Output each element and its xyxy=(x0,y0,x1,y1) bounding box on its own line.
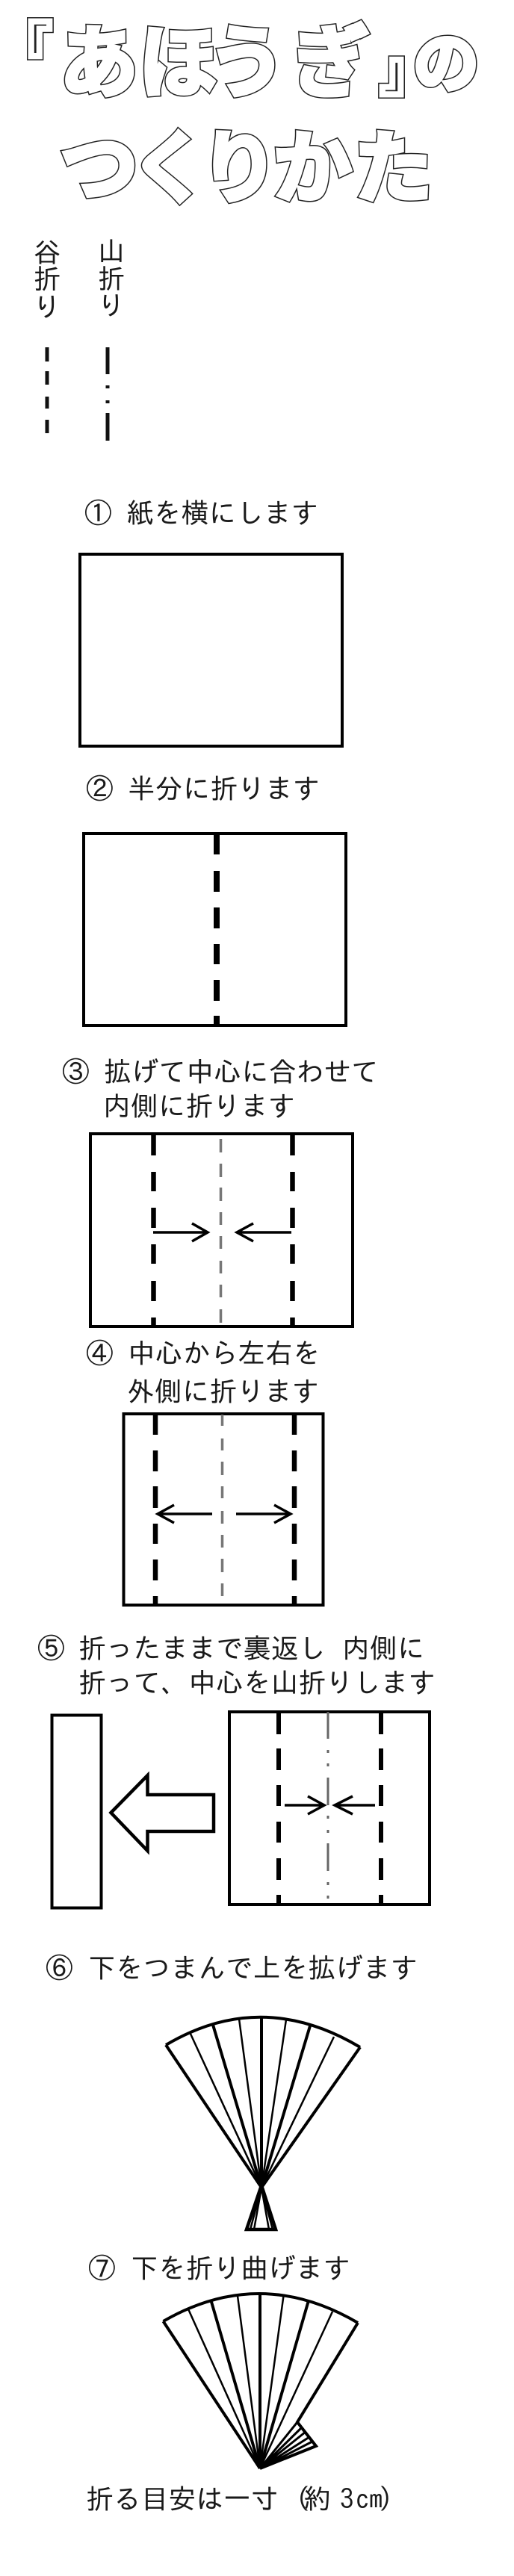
title: う xyxy=(208,0,286,114)
title: う xyxy=(208,0,286,114)
step 2 diagram: paper with centre fold xyxy=(84,834,346,1025)
step 2 heading: ② xyxy=(86,775,114,802)
step 3 diagram: fold to centre xyxy=(90,1134,353,1326)
title: あ xyxy=(60,0,138,114)
step 6 heading: ⑥ xyxy=(46,1954,73,1981)
arrows xyxy=(285,1796,375,1814)
step 1 heading: ① xyxy=(84,499,112,527)
step 5 diagram: fold and mountain fold centre xyxy=(229,1712,430,1905)
step 7 heading: ⑦ xyxy=(88,2254,116,2282)
step 5 block arrow xyxy=(111,1775,214,1851)
title: あ xyxy=(60,0,138,114)
note: 折る目安は一寸 xyxy=(86,2486,279,2513)
title: り xyxy=(200,105,279,219)
title: の xyxy=(413,11,479,106)
step 7 heading: 下を折り曲げます xyxy=(131,2254,350,2282)
step 5 heading: ⑤ xyxy=(37,1634,65,1662)
title: の xyxy=(413,11,479,106)
step 4 diagram: fold outward xyxy=(124,1414,323,1605)
step 5 heading: 折ったままで裏返し xyxy=(78,1635,326,1662)
title: ほ xyxy=(139,0,217,114)
title: か xyxy=(273,105,352,219)
title: ぎ xyxy=(291,0,370,114)
step 5 heading xyxy=(37,1634,436,1696)
legend: mountain fold: 山折り xyxy=(98,238,125,318)
step 4 heading: 外側に折ります xyxy=(127,1378,320,1405)
title: く xyxy=(130,105,208,219)
title: か xyxy=(273,105,352,219)
step 3 heading: ③ xyxy=(62,1058,90,1085)
note: m xyxy=(369,2486,383,2513)
title: つ xyxy=(60,105,138,219)
step 6 heading: 下をつまんで上を拡げます xyxy=(88,1954,418,1981)
legend: mountain fold xyxy=(98,238,125,441)
note: 約 xyxy=(303,2486,331,2513)
folded base lines xyxy=(260,2422,312,2468)
step 4 heading xyxy=(86,1339,321,1405)
pinched base xyxy=(247,2185,276,2229)
step 1 heading: 紙を横にします xyxy=(126,500,319,527)
note: （ xyxy=(282,2486,310,2513)
arrows xyxy=(153,1223,291,1241)
title: く xyxy=(130,105,208,219)
title xyxy=(0,0,479,219)
title: 』 xyxy=(380,25,436,107)
step 3 heading: 拡げて中心に合わせて xyxy=(104,1058,379,1085)
title: 』 xyxy=(380,25,436,107)
note: 3 xyxy=(340,2486,353,2513)
step 5 result: narrow folded strip xyxy=(52,1715,102,1908)
arrows xyxy=(158,1505,291,1523)
step 3 heading xyxy=(62,1058,379,1120)
legend: valley fold xyxy=(34,238,61,433)
legend: valley fold: 谷折り xyxy=(34,238,61,320)
step 1 diagram: paper xyxy=(80,554,342,746)
title: り xyxy=(200,105,279,219)
title: ほ xyxy=(139,0,217,114)
note: c xyxy=(356,2486,369,2513)
step 4 heading: 中心から左右を xyxy=(128,1340,321,1367)
step 4 heading: ④ xyxy=(86,1339,114,1367)
title: つ xyxy=(60,105,138,219)
step 5 heading: 折って、中心を山折りします xyxy=(78,1669,436,1696)
title: た xyxy=(354,105,433,219)
step 5 heading: 内側に xyxy=(342,1635,424,1662)
note: ） xyxy=(379,2486,406,2513)
title: た xyxy=(354,105,433,219)
step 7 diagram: fan with folded base xyxy=(163,2294,358,2468)
step 6 diagram: open fan xyxy=(166,2017,360,2229)
step 3 heading: 内側に折ります xyxy=(103,1093,296,1120)
step 2 heading: 半分に折ります xyxy=(128,775,321,802)
title: ぎ xyxy=(291,0,370,114)
